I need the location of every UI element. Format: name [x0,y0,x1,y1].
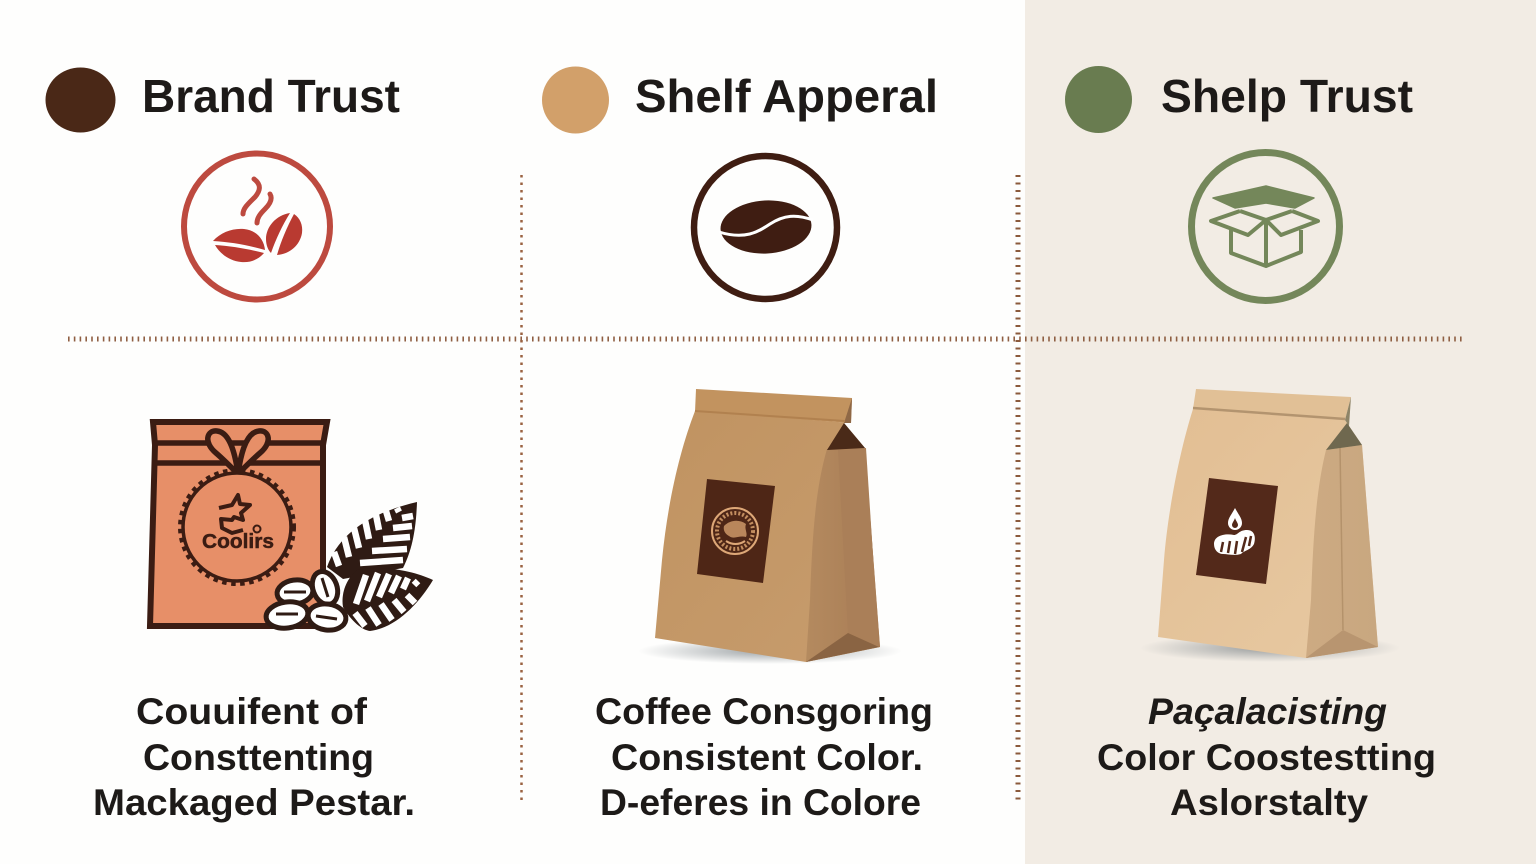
leaf: upper [327,502,417,579]
heading: Shelf Apperal: Shelf Apperal [635,70,938,122]
column 1: Brand Trust [46,68,433,823]
text: column 2 caption: D-eferes in Colore [600,782,921,823]
divider: horizontal dotted line [68,336,1462,342]
text: column 1 caption: Couuifent of [136,691,368,732]
column 2: Shelf Apperal [542,66,938,823]
leaf: lower [343,568,433,631]
text: column 3 caption: Aslorstalty [1170,782,1368,823]
label: Coolirs: Coolirs [202,531,274,553]
icon: drop and beans on bag label [1214,508,1255,555]
coffee beans [264,568,348,633]
text: column 3 caption [1097,691,1436,823]
swatch: dark brown [46,68,116,132]
text: column 1 caption: Mackaged Pestar. [93,782,415,823]
text: column 2 caption: Coffee Consgoring [595,691,933,732]
text: column 3 caption: Paçalacisting [1148,691,1387,732]
illustration: orange coffee bag with leaves and beans [150,422,433,633]
seal [180,470,294,584]
swatch: green [1065,66,1132,133]
text: column 1 caption [93,691,415,823]
illustration: light kraft coffee bag [1140,389,1400,662]
panel: right column background [1025,0,1536,864]
icon: coffee bean [694,156,837,299]
heading: Shelp Trust: Shelp Trust [1161,70,1413,122]
icon: open box [1192,152,1340,300]
icon: round seal on bag label [712,508,758,554]
heading: Brand Trust: Brand Trust [142,70,400,122]
text: column 2 caption: Consistent Color. [611,737,923,778]
text: column 2 caption [595,691,933,823]
divider: right vertical dotted line [1016,175,1020,802]
divider: left vertical dotted line [520,175,523,802]
swatch: tan [542,66,609,134]
text: column 3 caption: Color Coostestting [1097,737,1436,778]
text: column 1 caption: Consttenting [143,737,374,778]
illustration: brown kraft coffee bag [638,389,902,664]
column 3: Shelp Trust [1065,66,1436,823]
icon: steaming coffee beans [184,154,330,300]
